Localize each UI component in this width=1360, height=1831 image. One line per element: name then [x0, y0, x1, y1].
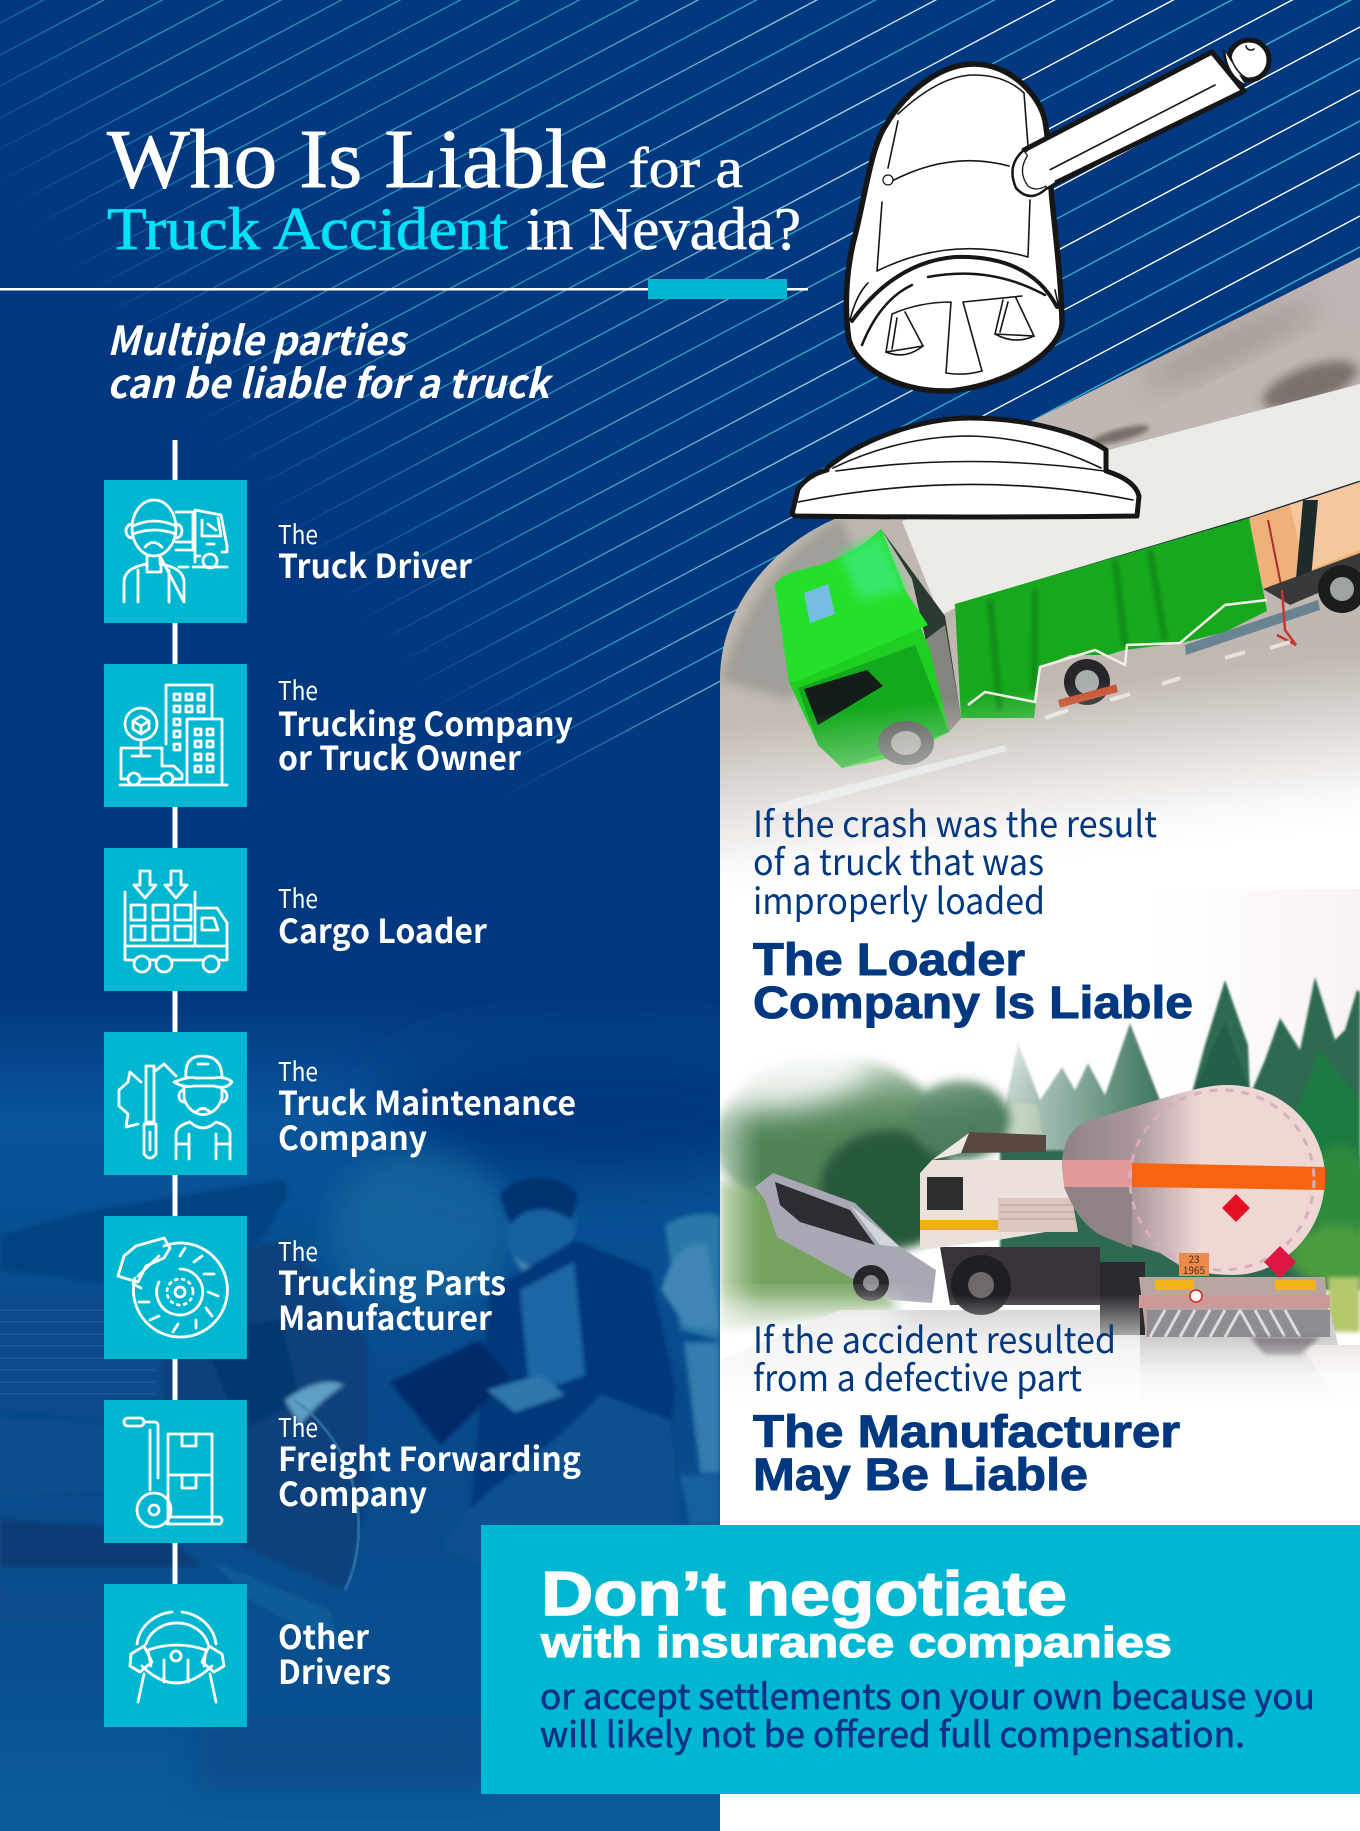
title: Who Is Liable	[107, 113, 608, 206]
label: Cargo Loader	[278, 905, 488, 953]
icon: brake disc	[118, 1238, 227, 1337]
front wheel	[878, 721, 934, 765]
label: Manufacturer	[278, 1292, 493, 1340]
truck cab	[961, 1132, 1046, 1153]
label: Drivers	[278, 1646, 391, 1694]
photo: tanker crash scene	[510, 889, 1360, 1530]
text block: manufacturer liability: May Be Liable	[753, 1449, 1088, 1500]
label	[278, 1408, 581, 1516]
photo element: woman	[661, 1214, 720, 1525]
label	[278, 671, 573, 780]
icon: gavel sound block	[792, 418, 1139, 517]
fog fade	[720, 669, 1360, 900]
panel: right white column	[720, 895, 1360, 1831]
text block: manufacturer liability: from a defective part	[753, 1350, 1082, 1402]
forest	[980, 977, 1360, 1290]
cargo load	[1249, 482, 1360, 589]
label: The	[278, 671, 318, 708]
callout: don't negotiate: or accept settlements on your own because you	[540, 1669, 1315, 1720]
label: Other	[278, 1611, 370, 1659]
truck chassis	[940, 1247, 1100, 1305]
icon: driver and truck	[124, 500, 227, 602]
icon: mechanic with gear and screwdriver	[119, 1056, 232, 1159]
label: Freight Forwarding	[278, 1433, 581, 1481]
gavel handle	[1012, 40, 1269, 196]
rear of trailer	[1139, 1277, 1330, 1337]
label: The	[278, 515, 318, 552]
title: Truck Accident	[107, 196, 508, 262]
party 3: cargo loader	[104, 848, 488, 991]
text block: loader company liability: The Loader	[753, 934, 1025, 985]
hazard plate	[1179, 1253, 1209, 1276]
label: or Truck Owner	[278, 732, 522, 780]
tanker	[1062, 1085, 1325, 1275]
diagonal stripe pattern	[0, 0, 1360, 789]
label: Trucking Company	[278, 698, 573, 746]
label	[278, 1052, 576, 1160]
car	[755, 1173, 936, 1303]
label	[278, 515, 473, 588]
label: The	[278, 1052, 318, 1089]
party 5: trucking parts manufacturer	[104, 1216, 506, 1359]
party 7: other drivers	[104, 1584, 391, 1727]
label: Truck Driver	[278, 540, 473, 588]
label	[278, 1611, 391, 1694]
icon: cargo truck with arrows	[125, 871, 227, 972]
text block: loader company liability: If the crash was the result	[753, 796, 1157, 848]
callout: don't negotiate: Don’t negotiate	[541, 1560, 1067, 1629]
bushes	[720, 1056, 940, 1199]
hazard plate: 23	[1188, 1251, 1200, 1266]
callout: don't negotiate: with insurance companies	[540, 1619, 1172, 1667]
photo: green truck being loaded	[720, 250, 1360, 905]
label: Company	[278, 1112, 427, 1160]
label: Truck Maintenance	[278, 1077, 576, 1125]
subtitle: Multiple parties	[107, 309, 409, 367]
trailer chassis	[1263, 553, 1360, 605]
photo: tinted accident scene	[0, 1030, 720, 1831]
title: in Nevada?	[526, 196, 801, 262]
party 6: freight forwarding company	[104, 1400, 581, 1543]
label: Company	[278, 1468, 427, 1516]
cab step and chassis	[881, 529, 961, 732]
truck cab	[775, 529, 949, 768]
text block: loader company liability: improperly loaded	[753, 873, 1045, 925]
middle wheel	[1064, 659, 1110, 705]
label: Trucking Parts	[278, 1257, 506, 1305]
icon: hand truck with boxes	[124, 1418, 222, 1527]
callout: don't negotiate	[481, 1525, 1360, 1794]
title	[107, 113, 801, 262]
icon: buildings and delivery truck	[120, 685, 227, 785]
photo element: man crouching	[390, 1176, 676, 1504]
label: The	[278, 879, 318, 916]
green curtain	[955, 518, 1267, 718]
text block: manufacturer liability	[753, 1312, 1180, 1500]
scales of justice	[886, 296, 1034, 374]
callout: don't negotiate: will likely not be offered full compensation.	[540, 1707, 1245, 1758]
subtitle: can be liable for a truck	[107, 352, 554, 410]
text block: manufacturer liability: If the accident resulted	[753, 1312, 1116, 1364]
subtitle	[107, 309, 554, 410]
label	[278, 879, 488, 953]
icon: gavel head	[846, 40, 1269, 391]
title: for a	[628, 137, 743, 200]
text block: loader company liability	[753, 796, 1193, 1028]
label: The	[278, 1232, 318, 1269]
road	[749, 1310, 1338, 1380]
text block: manufacturer liability: The Manufacturer	[753, 1406, 1180, 1457]
trailer roof	[902, 384, 1360, 616]
soft fades	[730, 1044, 1062, 1127]
party 4: truck maintenance company	[104, 1032, 576, 1175]
timeline connector	[172, 440, 178, 1640]
party 1: truck driver	[104, 480, 473, 623]
party 2: trucking company	[104, 664, 573, 807]
text block: loader company liability: Company Is Liable	[753, 977, 1193, 1028]
loading ramp	[770, 745, 1007, 815]
icon: hands on steering wheel	[130, 1612, 224, 1702]
label: The	[278, 1408, 318, 1445]
text block: loader company liability: of a truck that was	[753, 834, 1044, 886]
divider with teal accent	[0, 279, 808, 299]
hazard plate: 1965	[1183, 1262, 1206, 1277]
label	[278, 1232, 506, 1340]
